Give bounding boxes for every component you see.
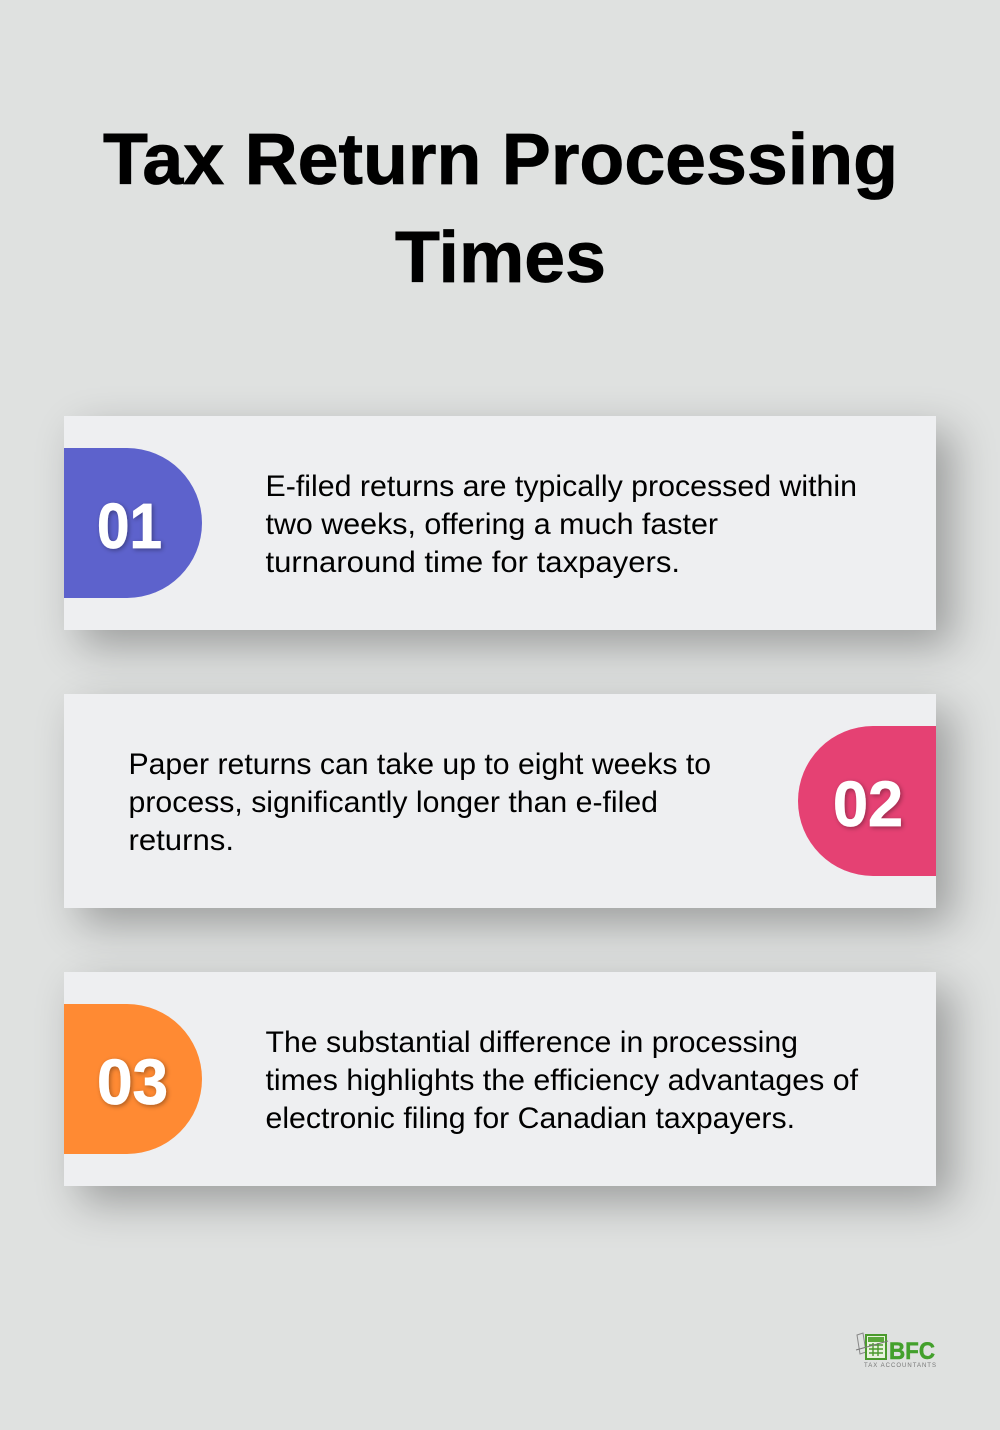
text: card 3: times highlights the efficiency advantages of (266, 1064, 859, 1097)
badge: 03 (64, 1004, 202, 1154)
number 03: 03 (97, 1046, 168, 1118)
text: card 3: The substantial difference in processing (266, 1026, 798, 1059)
title: Tax Return Processing (103, 120, 898, 200)
text: card 3 (266, 1026, 859, 1135)
logo: BFC Tax Accountants: BFC (889, 1338, 935, 1365)
text: card 2 (128, 748, 711, 857)
title (103, 120, 898, 298)
title: Times (395, 218, 606, 298)
badge: 01 (64, 448, 202, 598)
text: card 1: turnaround time for taxpayers. (266, 546, 680, 579)
panel: card 3 (64, 972, 936, 1186)
text: card 2: returns. (128, 824, 234, 857)
number 02: 02 (833, 768, 903, 840)
logo: BFC Tax Accountants (856, 1333, 936, 1369)
text: card 1 (266, 470, 857, 579)
logo: BFC Tax Accountants: TAX ACCOUNTANTS (864, 1363, 936, 1369)
text: card 1: E-filed returns are typically processed within (266, 470, 857, 503)
text: card 2: Paper returns can take up to eight weeks to (128, 748, 711, 781)
panel: card 1 (64, 416, 936, 630)
badge: 02 (798, 726, 936, 876)
text: card 1: two weeks, offering a much faster (266, 508, 718, 541)
number 01: 01 (97, 490, 162, 562)
panel: card 2 (64, 694, 936, 908)
text: card 2: process, significantly longer than e-filed (128, 786, 658, 819)
text: card 3: electronic filing for Canadian taxpayers. (266, 1102, 795, 1135)
